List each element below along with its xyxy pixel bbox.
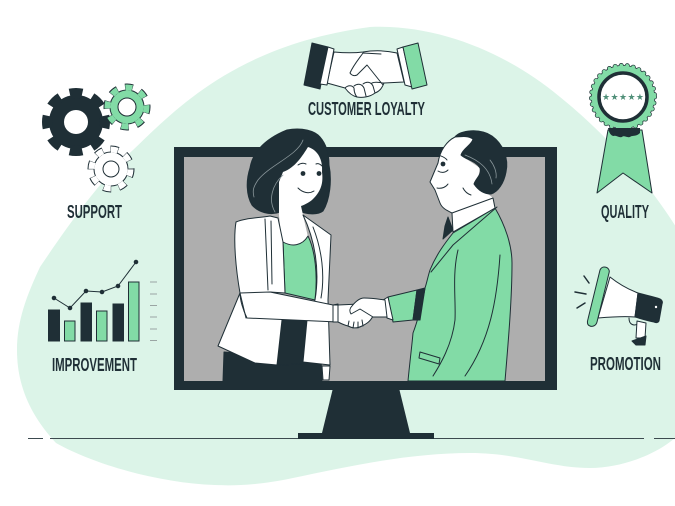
ribbon scallop	[608, 128, 640, 137]
suit pocket	[419, 352, 440, 364]
woman hand	[338, 304, 373, 328]
man eye and smile	[437, 155, 471, 195]
woman eyes and smile	[298, 163, 322, 193]
man cuff	[383, 297, 393, 320]
icon: customer loyalty handshake	[304, 43, 427, 97]
megaphone rim	[587, 267, 609, 326]
white cuff right	[397, 47, 412, 87]
man collar	[452, 198, 495, 232]
dark gear	[47, 93, 105, 151]
woman hair	[247, 129, 330, 214]
icon: quality rosette	[591, 65, 655, 193]
icon: promotion megaphone	[575, 267, 662, 345]
woman neck and face	[279, 147, 322, 245]
monitor stand	[298, 388, 434, 439]
man face	[430, 136, 495, 232]
label: customer loyalty: CUSTOMER LOYALTY	[308, 98, 425, 119]
woman top	[283, 236, 316, 300]
hair highlights	[253, 140, 303, 212]
man hair	[455, 131, 507, 194]
central handshake	[333, 297, 393, 328]
man sleeve	[388, 290, 417, 322]
monitor screen	[184, 157, 545, 381]
woman trousers	[223, 352, 322, 381]
woman arm	[240, 292, 338, 322]
suit lines	[431, 207, 500, 376]
woman dark shirt	[277, 320, 307, 365]
ground line	[28, 438, 675, 440]
icon: improvement chart	[48, 260, 157, 341]
woman jacket left	[218, 216, 285, 365]
speaker back	[635, 293, 662, 323]
speaker dot	[655, 306, 657, 308]
rosette ring	[599, 73, 647, 121]
green cuff	[403, 43, 427, 89]
man tie	[443, 217, 453, 239]
man hair highlights	[465, 155, 496, 184]
rosette scalloped edge	[591, 65, 655, 129]
woman	[218, 129, 338, 381]
trend line	[52, 260, 138, 310]
sound rays	[575, 276, 589, 308]
white cuff left	[320, 47, 334, 85]
sleeve shadow	[413, 288, 425, 320]
handle loop	[629, 318, 638, 325]
woman jacket right	[303, 215, 331, 365]
ribbon	[597, 130, 652, 193]
man face outline	[430, 137, 455, 213]
man hand	[350, 298, 387, 317]
handle foot	[632, 336, 646, 345]
cone	[598, 277, 638, 318]
white gear	[91, 149, 131, 189]
woman leg highlight	[322, 366, 330, 380]
thumb lines	[345, 53, 384, 97]
woman cuff	[333, 305, 338, 322]
label: support: SUPPORT	[67, 201, 122, 222]
label: improvement: IMPROVEMENT	[52, 354, 137, 375]
hands	[327, 51, 404, 97]
monitor frame	[174, 147, 557, 390]
man suit	[408, 208, 512, 381]
stars: ★★★★★	[602, 93, 644, 103]
bars	[48, 282, 139, 341]
green gear	[107, 87, 147, 127]
icon: gears	[47, 87, 147, 189]
man	[388, 131, 512, 381]
finger lines	[348, 320, 363, 328]
dark cuff	[304, 43, 328, 89]
jacket fold lines	[240, 219, 323, 318]
monitor	[174, 147, 557, 439]
axis ticks	[150, 282, 157, 340]
handle	[636, 321, 646, 338]
